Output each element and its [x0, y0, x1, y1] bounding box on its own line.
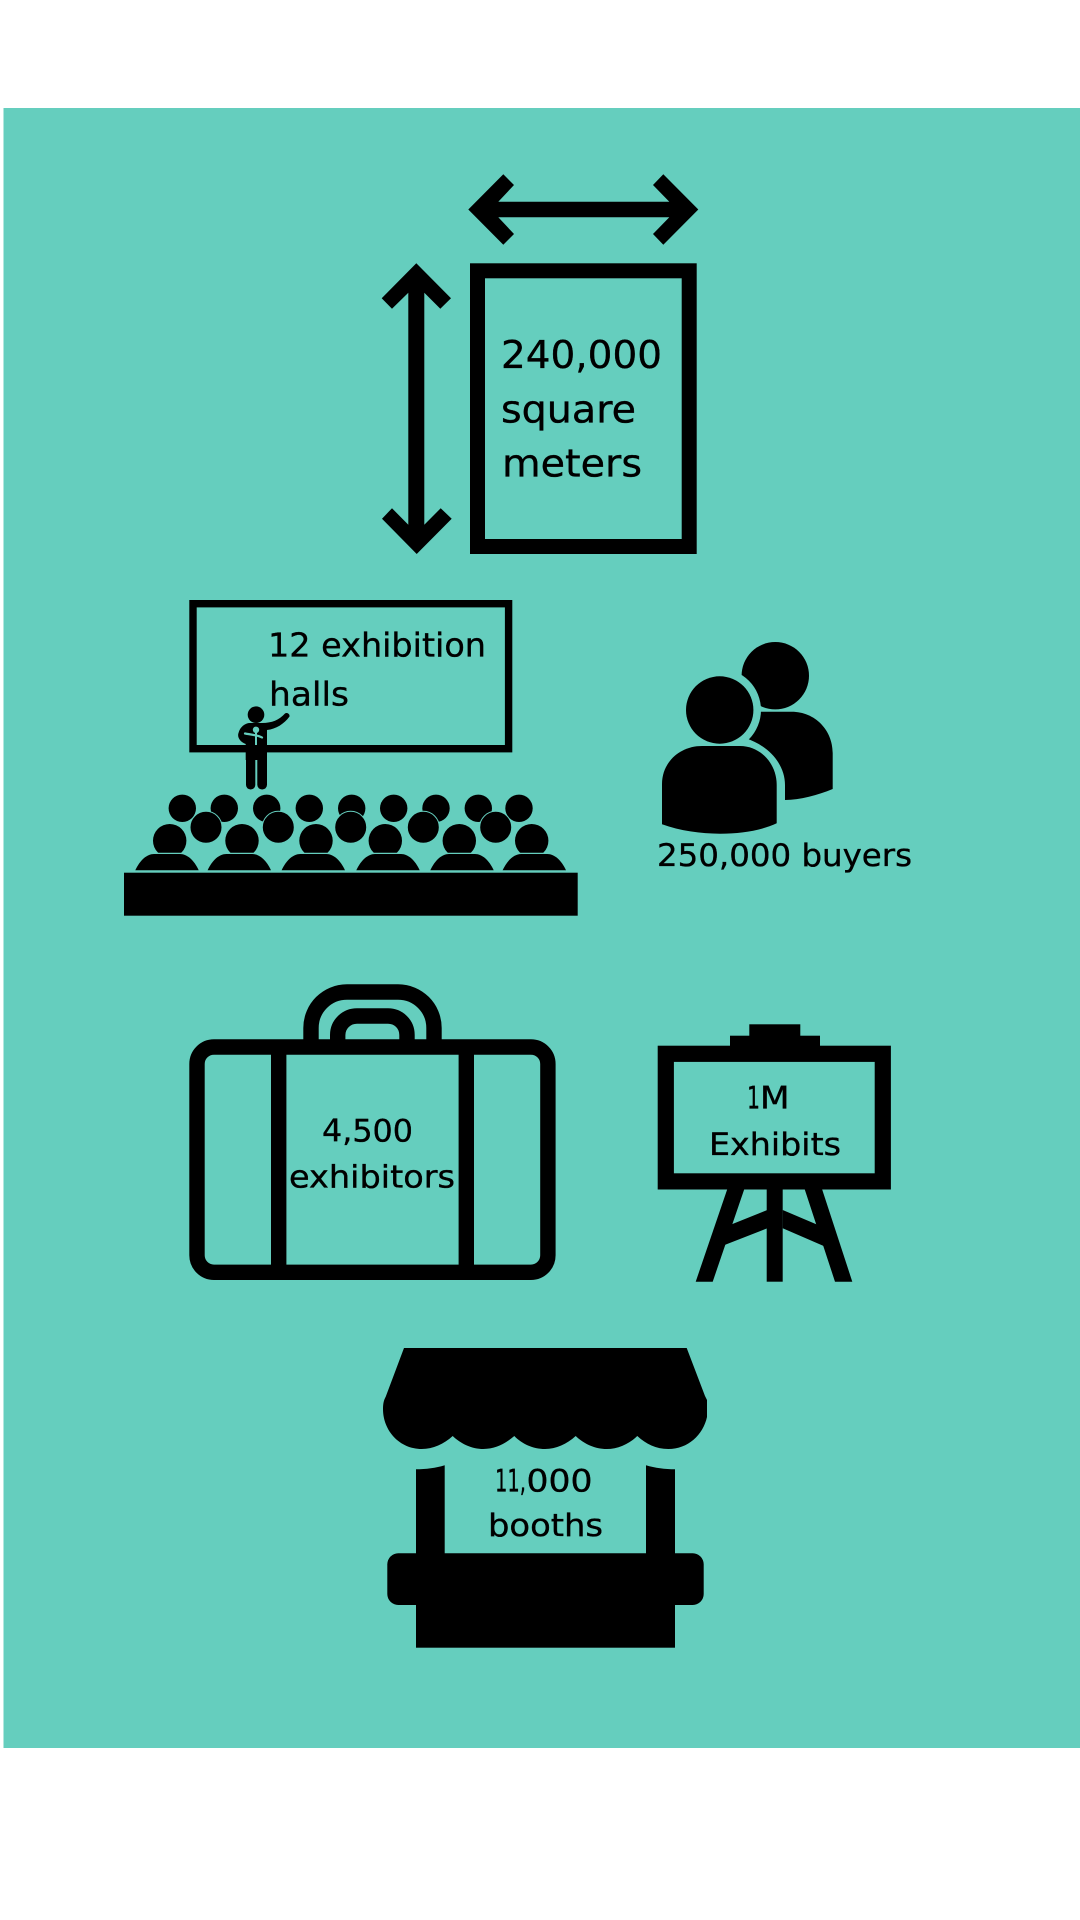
text: 4,500 exhibitors — [289, 1114, 455, 1196]
text: 240,000 square meters: square — [501, 388, 636, 432]
icon: suitcase — [197, 992, 548, 1272]
text: 240,000 square meters — [501, 333, 662, 486]
text: 250,000 buyers: 250,000 buyers — [657, 838, 912, 874]
group: buyers — [657, 642, 912, 874]
group: exhibition halls — [124, 604, 578, 916]
text: 240,000 square meters: meters — [502, 442, 642, 486]
text: 11,000 booths: 11, — [495, 1463, 526, 1499]
text: 1M Exhibits — [709, 1081, 841, 1163]
arrow: horizontal double-headed — [468, 174, 698, 245]
icon: easel — [666, 1024, 883, 1282]
text: 240,000 square meters: 240,000 — [501, 333, 662, 377]
icon: area rectangle — [478, 271, 689, 546]
text: 1M Exhibits: 1 — [747, 1081, 760, 1117]
text: 11,000 booths: 000 — [526, 1463, 592, 1499]
text: 1M Exhibits: M — [760, 1081, 790, 1117]
text: 12 exhibition halls: 12 exhibition — [268, 626, 486, 665]
text: 4,500 exhibitors: 4,500 — [322, 1114, 413, 1150]
icon: two people — [662, 642, 833, 834]
group: exhibits — [666, 1024, 883, 1282]
group: exhibitors — [197, 992, 548, 1272]
group: floor area — [382, 174, 698, 554]
icon: market stall — [383, 1348, 707, 1648]
icon: audience — [135, 795, 566, 870]
text: 4,500 exhibitors: exhibitors — [289, 1160, 455, 1196]
group: booths — [383, 1348, 707, 1648]
icon: presenter — [238, 706, 290, 790]
text: 1M Exhibits: Exhibits — [709, 1127, 841, 1163]
text: 12 exhibition halls: halls — [269, 674, 349, 713]
text: 12 exhibition halls — [268, 626, 486, 713]
text: 11,000 booths: booths — [488, 1508, 603, 1544]
icon: presentation screen — [193, 604, 509, 749]
arrow: vertical double-headed — [382, 263, 452, 554]
icon: stage desk — [124, 873, 578, 916]
text: 11,000 booths — [488, 1463, 603, 1544]
